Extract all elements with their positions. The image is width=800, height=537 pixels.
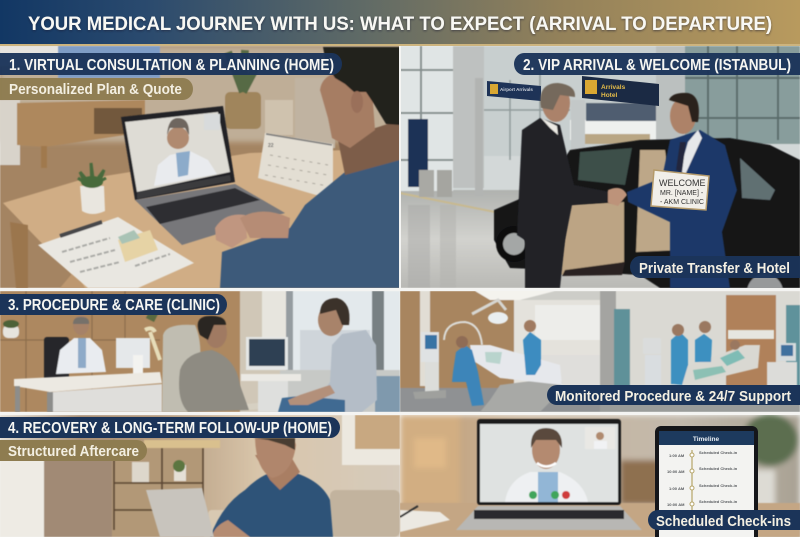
open laptop back bbox=[146, 488, 214, 537]
phone timeline app: 10:00 AM bbox=[667, 502, 685, 507]
black car with open door bbox=[493, 137, 800, 288]
clipboard plan document bbox=[38, 217, 194, 288]
phone timeline app: Scheduled Check-in bbox=[699, 450, 738, 455]
airport direction signs: Arrivals bbox=[601, 84, 626, 91]
patient monitor on cart bbox=[241, 337, 301, 412]
phone timeline app: 10:00 AM bbox=[667, 469, 685, 474]
airport direction signs: Airport Arrivals bbox=[500, 87, 533, 92]
panel: recovery at home bbox=[0, 415, 400, 537]
seated patient bbox=[162, 315, 258, 412]
caption: structured aftercare: Structured Aftercare bbox=[8, 443, 139, 460]
doctor at desk bbox=[43, 316, 106, 378]
panel: procedure and care consultation bbox=[0, 291, 400, 412]
surgical lamp and ceiling arm bbox=[444, 300, 508, 345]
host holding welcome sign bbox=[627, 93, 737, 288]
laptop with smiling doctor bbox=[456, 419, 642, 530]
phone timeline app: Scheduled Check-in bbox=[699, 499, 738, 504]
phone timeline app: Scheduled Check-in bbox=[699, 483, 738, 488]
caption: step 1: 1. VIRTUAL CONSULTATION & PLANNING (HOME) bbox=[9, 57, 334, 74]
man smiling on laptop bbox=[210, 438, 333, 537]
caption: step 1 bbox=[0, 53, 342, 75]
calendar bbox=[258, 133, 333, 200]
desk surface bbox=[400, 503, 800, 537]
icon: potted plant bbox=[78, 163, 106, 214]
panel: virtual consultation at home bbox=[0, 46, 400, 288]
notebook and pen bbox=[400, 506, 450, 532]
desk with monitor bbox=[13, 315, 162, 412]
welcome sign: MR. [NAME] - bbox=[660, 190, 704, 197]
panel: follow-up video call and timeline bbox=[400, 414, 800, 537]
welcome sign bbox=[651, 170, 709, 210]
header banner bbox=[0, 0, 800, 46]
welcome sign: - AKM CLINIC bbox=[660, 199, 704, 206]
left operating room: ultrasound, staff and bed bbox=[413, 320, 562, 412]
man at desk bbox=[215, 47, 400, 288]
phone timeline app: 1:00 AM bbox=[669, 486, 685, 491]
right ward: staff, bed and monitors bbox=[643, 321, 797, 390]
phone timeline app: Timeline bbox=[693, 436, 720, 443]
laptop bbox=[121, 106, 285, 245]
title: YOUR MEDICAL JOURNEY WITH US: WHAT TO EXPECT (ARRIVAL TO DEPARTURE) bbox=[28, 13, 772, 35]
caption: step 3: 3. PROCEDURE & CARE (CLINIC) bbox=[8, 297, 220, 314]
calendar: 22 bbox=[268, 143, 274, 149]
phone timeline app bbox=[655, 426, 758, 537]
caption: step 4: 4. RECOVERY & LONG-TERM FOLLOW-UP (HOME) bbox=[8, 420, 332, 437]
phone timeline app: 1:00 AM bbox=[669, 453, 685, 458]
welcome sign: WELCOME bbox=[659, 178, 706, 188]
phone timeline app: Scheduled Check-in bbox=[699, 466, 738, 471]
doctor talking to patient bbox=[278, 298, 377, 412]
airport direction signs: Hotel bbox=[601, 92, 617, 99]
airport direction signs bbox=[487, 76, 659, 106]
panel: VIP arrival and welcome bbox=[400, 46, 800, 310]
table bbox=[3, 150, 350, 288]
man greeting in dark suit bbox=[517, 83, 627, 288]
panel: monitored procedure rooms bbox=[400, 291, 800, 412]
caption: personalized plan: Personalized Plan & Quote bbox=[9, 81, 182, 98]
